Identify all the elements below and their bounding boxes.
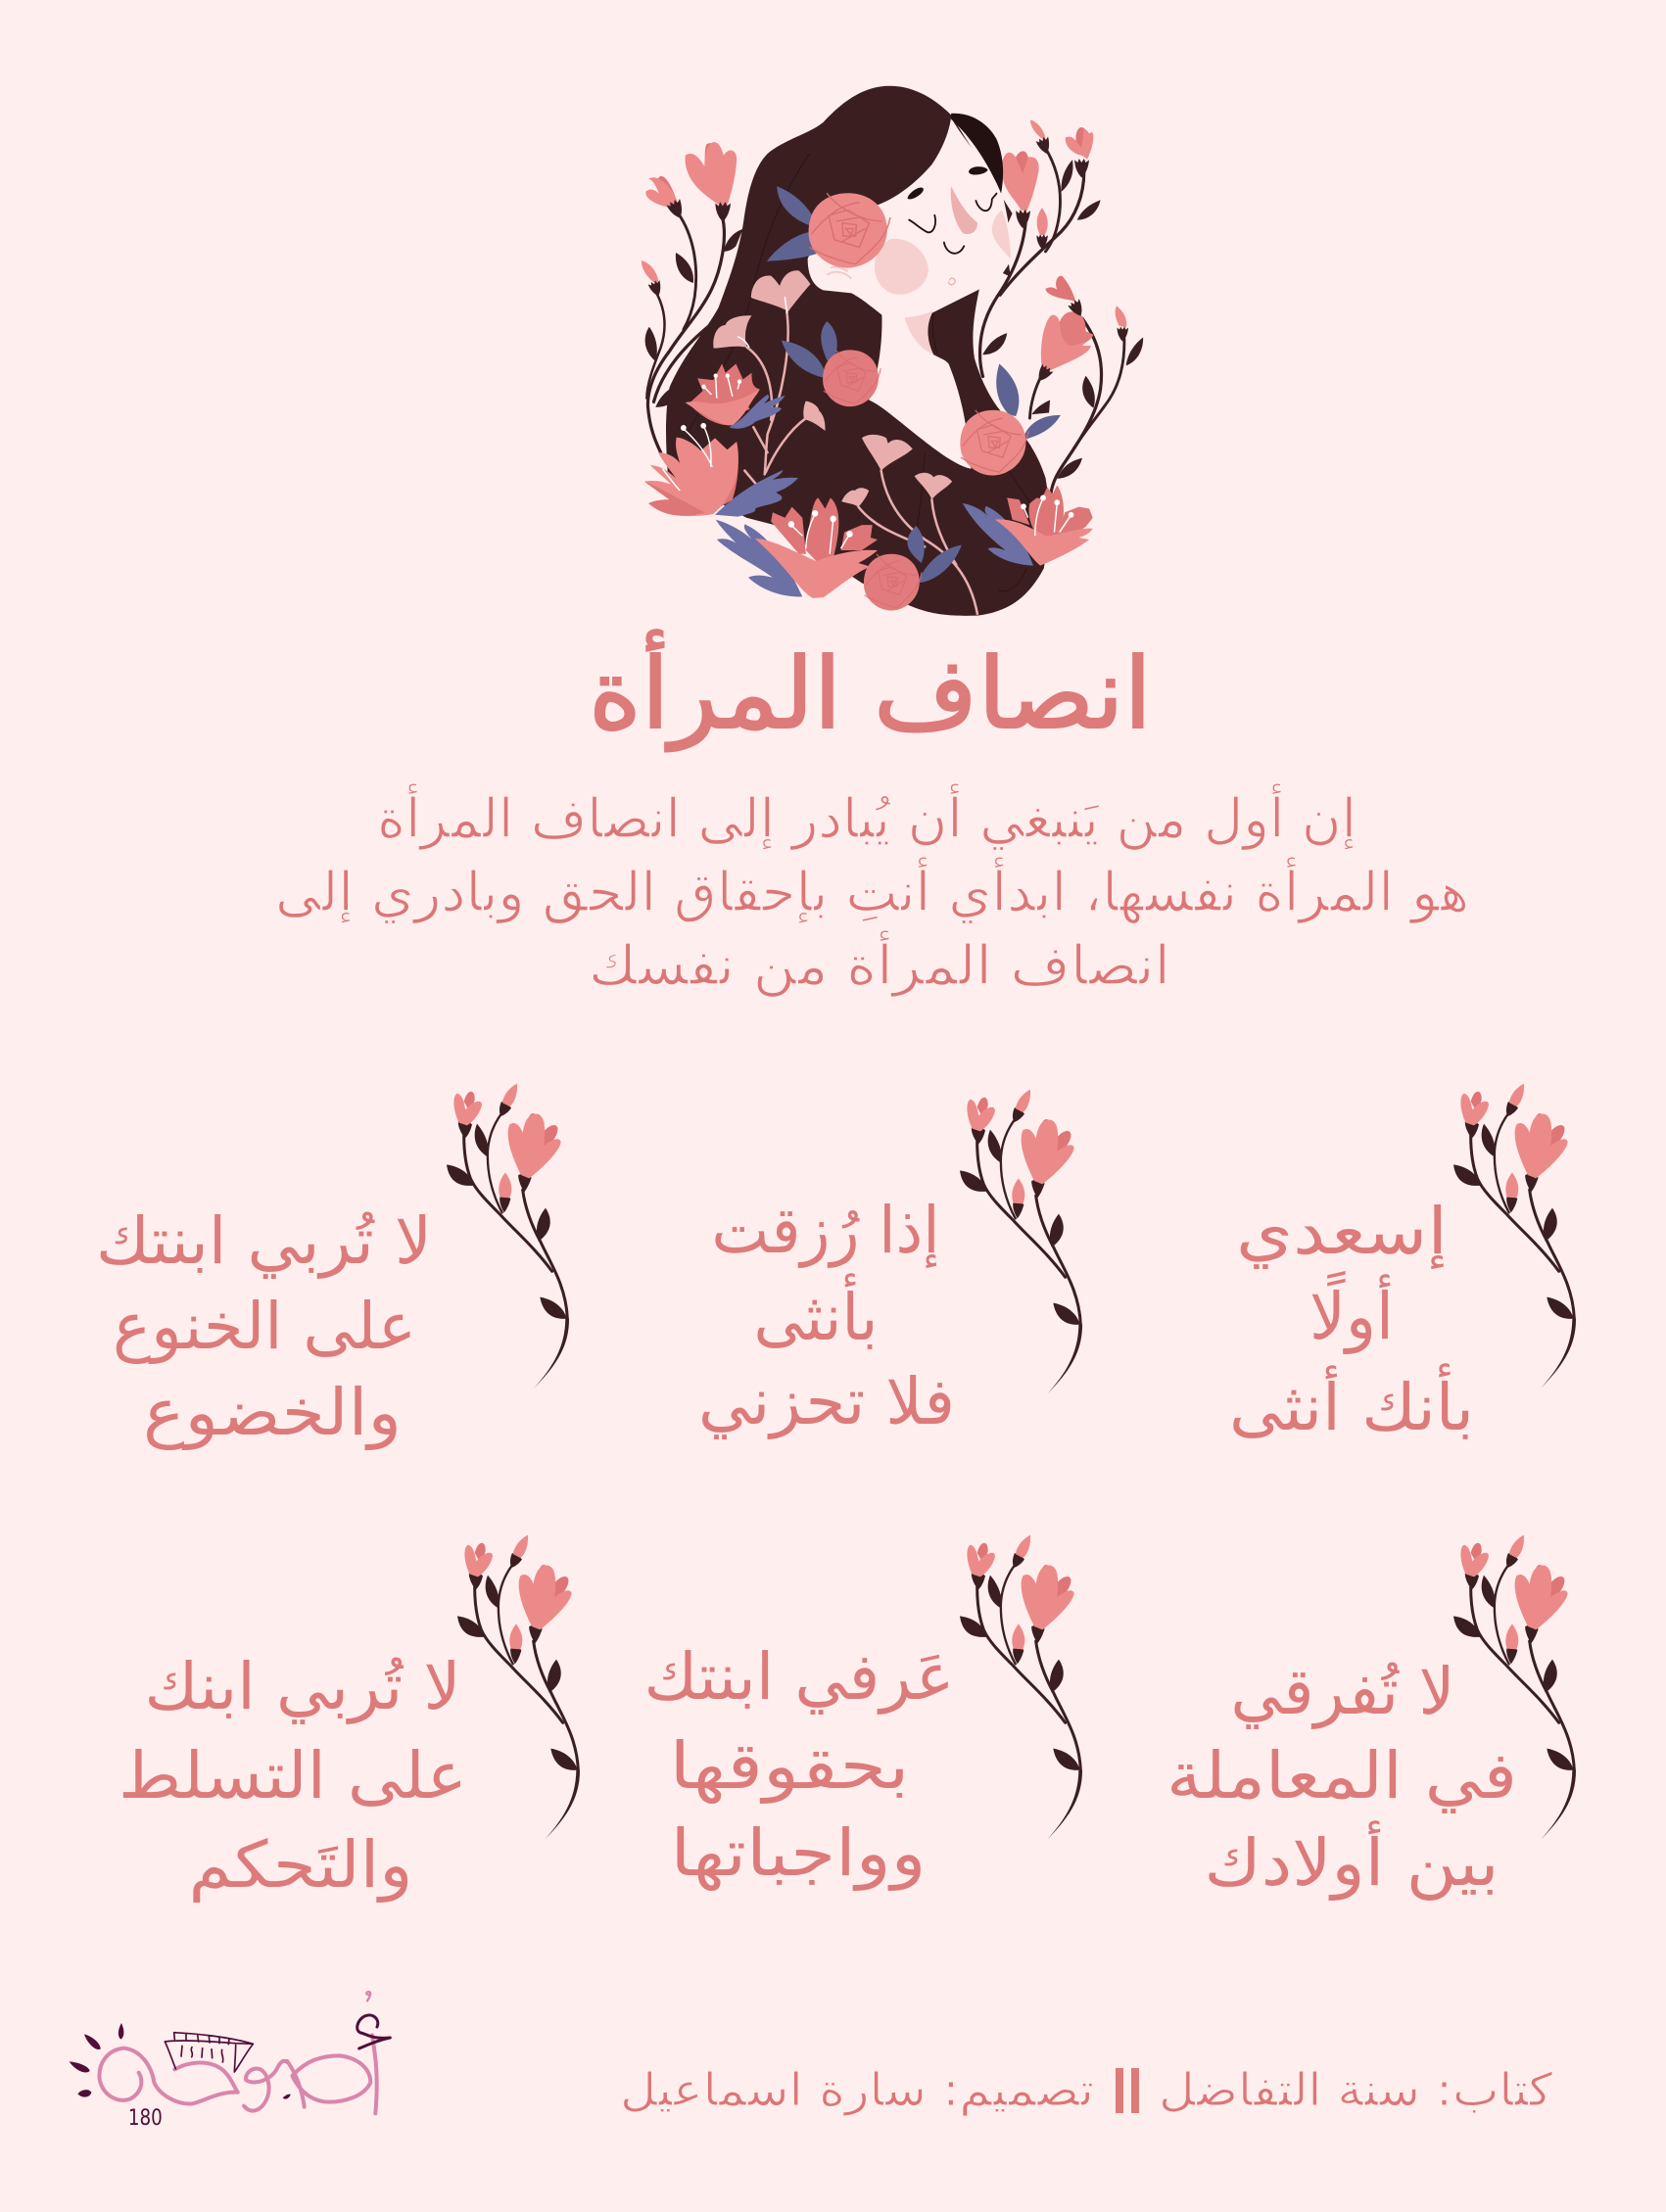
text: row 1 left: لا تُربي ابنتك <box>96 1203 432 1279</box>
face and neck <box>808 118 1011 469</box>
text: row 1 left: على الخنوع <box>113 1289 416 1364</box>
text: row 1 middle: بأنثى <box>754 1273 878 1355</box>
footer credits <box>620 2063 1552 2116</box>
text: row 2 middle: بحقوقها <box>670 1728 909 1804</box>
branch: row 2 right <box>1453 1535 1576 1840</box>
hair strands <box>689 154 1033 591</box>
text: row 1 middle: إذا رُزقت <box>711 1193 940 1269</box>
intro paragraph: هو المرأة نفسها، ابدأي أنتِ بإحقاق الحق وبادري إلى <box>275 857 1469 924</box>
text: row 2 middle: وواجباتها <box>670 1815 927 1891</box>
text: row 2 right: لا تُفرقي <box>1230 1654 1455 1729</box>
text: row 1 left <box>96 1203 432 1450</box>
ginkgo stems and leaves <box>713 270 977 614</box>
footer credits: كتاب: سنة التفاضل <box>1159 2063 1552 2116</box>
text: row 2 middle: عَرفي ابنتك <box>644 1639 954 1715</box>
blue leaves <box>767 186 1061 583</box>
hair <box>666 86 1049 616</box>
blue feather leaves <box>715 395 1033 596</box>
text: row 1 right: بأنك أنثى <box>1229 1363 1474 1445</box>
text: row 2 right: في المعاملة <box>1166 1738 1517 1813</box>
intro paragraph <box>275 783 1469 997</box>
text: row 2 right: بين أولادك <box>1205 1820 1499 1901</box>
right flower branches <box>980 120 1143 494</box>
text: row 2 right <box>1166 1654 1517 1901</box>
text: row 2 left: والتَحكم <box>188 1827 413 1903</box>
text: row 2 middle <box>644 1639 954 1891</box>
pink lotus flowers <box>644 364 1093 598</box>
intro paragraph: إن أول من يَنبغي أن يُبادر إلى انصاف المرأة <box>377 783 1357 851</box>
branch: row 2 left <box>457 1535 580 1840</box>
branch: row 1 right <box>1453 1084 1576 1388</box>
text: row 1 right <box>1229 1194 1474 1445</box>
illustration: woman with flowers <box>642 86 1143 616</box>
text: row 2 left: على التسلط <box>119 1738 467 1813</box>
text: row 2 left: لا تُربي ابنك <box>145 1649 460 1724</box>
branch: row 2 middle <box>960 1535 1082 1840</box>
branch: row 1 left <box>447 1084 569 1388</box>
text: row 1 right: أولًا <box>1309 1270 1394 1354</box>
text: row 2 left <box>119 1649 467 1903</box>
face details <box>827 166 1011 354</box>
left flower branches <box>642 142 743 452</box>
flower stamens <box>662 297 1071 554</box>
logo number: 180 <box>128 2106 163 2131</box>
text: row 1 middle <box>698 1193 955 1439</box>
text: row 1 middle: فلا تحزني <box>698 1364 955 1439</box>
roses <box>809 193 1028 611</box>
text: row 1 left: والخضوع <box>143 1375 402 1450</box>
branch: row 1 middle <box>960 1090 1082 1394</box>
footer credits: تصميم: سارة اسماعيل <box>620 2063 1094 2116</box>
title: انصاف المرأة <box>589 630 1152 751</box>
intro paragraph: انصاف المرأة من نفسك <box>589 930 1170 997</box>
hair fringe <box>951 114 1003 194</box>
logo <box>70 1992 390 2131</box>
text: row 1 right: إسعدي <box>1236 1194 1448 1270</box>
